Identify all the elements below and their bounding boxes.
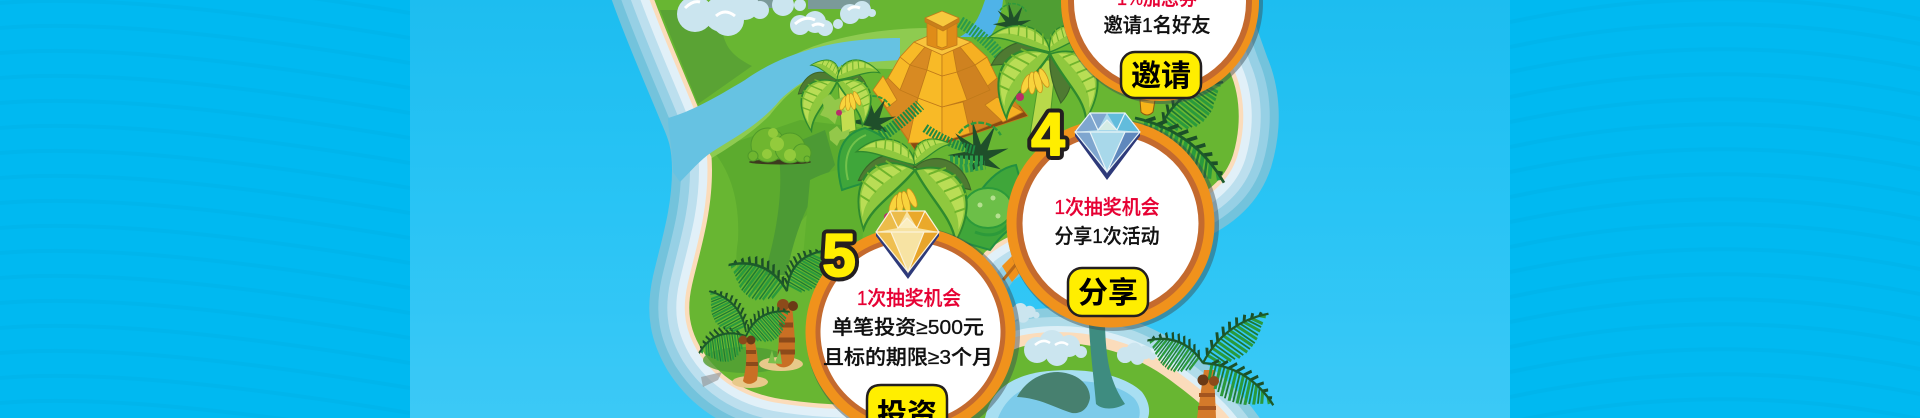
coconut palm: behind circle 4 xyxy=(1122,67,1236,200)
number 5: 5 xyxy=(822,222,856,289)
text: condition: 分享1次活动 xyxy=(1054,225,1160,248)
pyramid xyxy=(873,11,1028,153)
icon: gold diamond xyxy=(876,211,939,279)
connector: between circle 3 and 4 xyxy=(1140,100,1155,115)
text: condition: 邀请1名好友 xyxy=(1104,14,1210,37)
panel: circle 5 invest xyxy=(805,211,1020,418)
panel: circle 3 invite xyxy=(1061,0,1263,104)
clouds: lagoon xyxy=(1005,303,1156,366)
river xyxy=(668,0,1003,182)
island: main green land with water bands xyxy=(650,0,1239,405)
number 4: 4 xyxy=(1031,101,1065,168)
banana palm: left xyxy=(787,52,885,146)
bush: big leaves xyxy=(838,128,905,190)
island: lower right beach xyxy=(960,343,1225,418)
text: condition 1: 单笔投资≥500元 xyxy=(832,316,984,339)
connector: between circle 4 and 5 xyxy=(1002,256,1022,282)
bush: lower right leaves xyxy=(955,165,1030,250)
bush xyxy=(748,128,811,164)
button: share: 分享 xyxy=(1078,277,1138,310)
number 4: 4 xyxy=(1031,101,1065,168)
lagoon with rock xyxy=(985,370,1149,418)
stem xyxy=(1089,325,1125,408)
button: invest xyxy=(867,385,947,418)
land shading xyxy=(660,0,1070,373)
background: left wave strip xyxy=(0,0,410,418)
coconut palm: lower right xyxy=(1140,300,1283,418)
icon: blue diamond xyxy=(1075,113,1140,180)
plant cluster: ferns and dark spiky plants xyxy=(848,2,1031,172)
text: condition 2: 且标的期限≥3个月 xyxy=(823,346,993,369)
grey rocks behind clouds xyxy=(750,0,870,9)
background: central sea panel xyxy=(410,0,1510,418)
number 5: 5 xyxy=(822,222,856,289)
text: reward: 1次抽奖机会 xyxy=(1054,196,1160,219)
text: reward: 1次抽奖机会 xyxy=(857,287,961,310)
clouds: top xyxy=(677,0,876,36)
banana palm: centre xyxy=(837,128,987,242)
panel: circle 4 share xyxy=(1006,101,1219,331)
coconut palm: large left xyxy=(720,239,837,371)
button: share xyxy=(1068,268,1148,316)
banana palm: right xyxy=(978,15,1117,138)
button: invite: 邀请 xyxy=(1131,60,1191,93)
background: right wave strip xyxy=(1510,0,1920,418)
button: invite xyxy=(1121,52,1201,98)
coconut palm: small left xyxy=(693,281,798,388)
